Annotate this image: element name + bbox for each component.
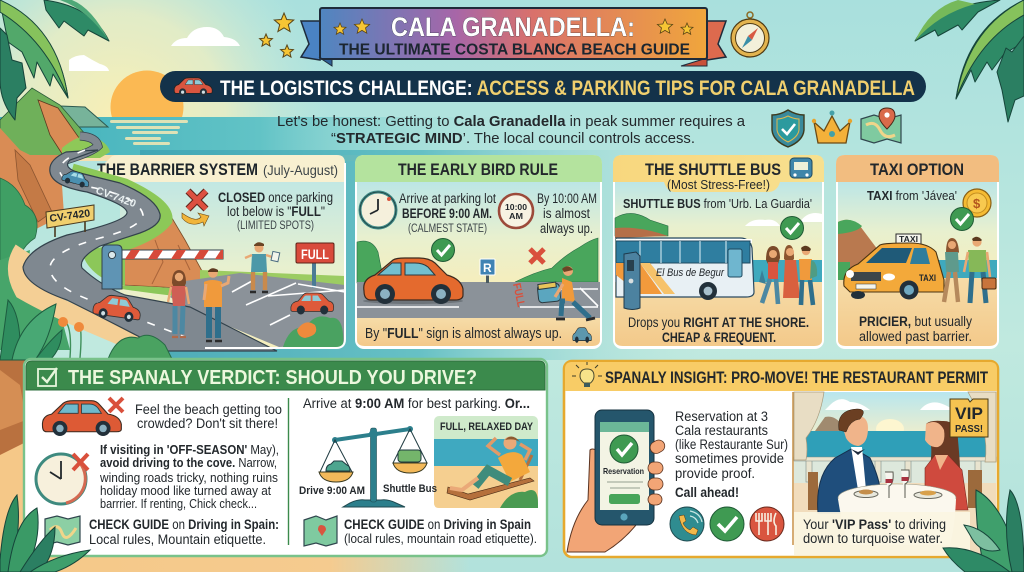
scale labels: Drive 9:00 AM — [299, 485, 365, 497]
hand holding phone: Reservation — [603, 466, 644, 476]
reservation text — [675, 409, 788, 500]
person relaxing in deck chair — [447, 436, 534, 500]
barrier callout: (LIMITED SPOTS) — [237, 220, 314, 232]
header strip — [86, 155, 345, 182]
early arrival text: Arrive at parking lot — [399, 191, 496, 206]
icon: bus — [790, 158, 812, 178]
shuttle benefits text: CHEAP & FREQUENT. — [662, 329, 776, 345]
banner stars — [334, 19, 693, 34]
guide text: CHECK GUIDE on Driving in Spain: — [89, 517, 279, 532]
ticket machine — [624, 252, 640, 310]
early arrival text: BEFORE 9:00 AM. — [402, 206, 492, 221]
header — [613, 155, 824, 192]
VIP pass ticket — [950, 399, 988, 437]
parking bay lines — [232, 281, 345, 325]
person: man pointing — [204, 268, 229, 341]
illustration: coastal cliffs and left palm — [0, 88, 110, 270]
beach picture — [434, 416, 538, 508]
guide text: (local rules, mountain road etiquette). — [344, 531, 537, 546]
subheading: (Most Stress-Free!) — [667, 178, 770, 192]
red car with X — [42, 398, 123, 436]
guide text: CHECK GUIDE on Driving in Spain — [344, 517, 531, 532]
panel sky — [120, 170, 345, 348]
route text: SHUTTLE BUS from 'Urb. La Guardia' — [623, 196, 812, 211]
dining man — [808, 409, 895, 513]
main title: CALA GRANADELLA: — [391, 12, 635, 42]
ten o'clock text: is almost — [543, 206, 590, 221]
road sign — [46, 205, 94, 237]
icon: clock 10am: AM — [509, 212, 523, 221]
foliage: top-left palm — [0, 0, 109, 120]
panel edge — [205, 163, 345, 348]
barrier callout: CLOSED once parking — [218, 190, 333, 205]
icon: coin: $ — [973, 196, 981, 211]
crowded text: Feel the beach getting too — [135, 402, 282, 417]
icon: crown — [812, 110, 852, 143]
heading: TAXI OPTION — [870, 161, 964, 179]
caption strip — [794, 512, 970, 555]
hand holding phone — [567, 410, 667, 552]
person: man with suitcase — [964, 237, 996, 303]
ten o'clock text: By 10:00 AM — [537, 191, 597, 206]
taxi benefits text — [859, 314, 972, 344]
beach picture: FULL, RELAXED DAY — [440, 421, 534, 433]
icon: map with pin — [861, 108, 901, 143]
icon: check — [432, 238, 454, 262]
icon: coin — [963, 189, 991, 217]
icon: check — [780, 216, 804, 240]
stars beside title — [260, 13, 294, 57]
full sign: FULL — [301, 247, 329, 262]
early arrival text: (CALMEST STATE) — [408, 223, 487, 235]
road label: CV-7420 — [94, 185, 138, 210]
off-season text — [99, 443, 279, 511]
taxi — [844, 234, 944, 300]
shuttle benefits text — [628, 314, 809, 345]
barrier callout — [218, 190, 333, 232]
shuttle benefits text: Drops you RIGHT AT THE SHORE. — [628, 314, 809, 330]
dining woman — [925, 421, 982, 510]
panel scene — [838, 182, 997, 346]
orange car — [363, 258, 463, 304]
barrier gate — [102, 245, 223, 289]
header — [565, 362, 997, 391]
icon: cutlery — [750, 507, 784, 541]
footer text: By "FULL" sign is almost always up. — [365, 326, 562, 342]
shuttle bus with label — [616, 238, 754, 300]
ground: green, sand and cliff — [0, 250, 70, 350]
guide text — [344, 517, 537, 546]
reservation text: Cala restaurants — [675, 423, 768, 438]
off-season text: If visiting in 'OFF-SEASON' May), — [100, 443, 279, 457]
subtitle: THE ULTIMATE COSTA BLANCA BEACH GUIDE — [339, 42, 690, 58]
reservation text: Reservation at 3 — [675, 409, 768, 424]
barrier callout: lot below is "FULL" — [227, 204, 325, 219]
panel: the spanaly verdict — [24, 359, 547, 556]
vertical divider — [792, 392, 794, 545]
column divider — [288, 398, 290, 545]
caption: Your 'VIP Pass' to driving — [803, 517, 946, 532]
small car icon — [573, 328, 592, 343]
panel: the barrier system — [0, 150, 345, 352]
icon: parking sign — [480, 259, 495, 283]
reservation text: (like Restaurante Sur) — [675, 437, 788, 452]
blue car on road — [61, 169, 91, 189]
panel scene — [615, 182, 822, 346]
panel: the shuttle bus — [613, 155, 824, 349]
icon: compass — [731, 12, 769, 57]
icon: clock 10am — [499, 194, 533, 228]
taxi: TAXI — [899, 235, 918, 244]
title banner — [301, 8, 726, 66]
caption — [803, 517, 946, 546]
person: kneeling driver — [555, 266, 595, 320]
VIP pass ticket: VIP — [955, 404, 983, 423]
off-season text: winding roads tricky, nothing ruins — [99, 471, 278, 485]
parking lot — [170, 273, 345, 347]
red car in lot — [291, 293, 334, 314]
icon: phone call — [670, 507, 704, 541]
panel: the early bird rule — [355, 155, 602, 349]
crowded text: crowded? Don't sit there! — [137, 416, 278, 431]
small crammed car — [537, 282, 561, 303]
guide text — [89, 517, 279, 547]
icon: map with pin — [304, 516, 337, 546]
foliage: top-right palm — [915, 0, 1024, 122]
crowded text — [135, 402, 282, 431]
clock with X — [36, 454, 88, 504]
intro text: “STRATEGIC MIND’. The local council controls access. — [331, 130, 695, 147]
winding road CV-7420 — [23, 150, 277, 351]
icon: red X — [530, 249, 544, 263]
icon: red X with arrow — [182, 191, 209, 226]
red car on road — [92, 293, 142, 323]
full sign — [296, 243, 334, 288]
panel scene — [357, 182, 600, 346]
ten o'clock text: always up. — [540, 221, 593, 236]
icon: map — [45, 516, 80, 545]
heading: THE SHUTTLE BUS — [645, 161, 781, 179]
bush and flower — [283, 316, 343, 347]
icon: shield — [772, 110, 804, 147]
heading: THE BARRIER SYSTEM — [97, 161, 258, 179]
icon: red car — [174, 78, 212, 96]
intro text: Let's be honest: Getting to Cala Granadella in peak summer requires a — [277, 113, 746, 130]
header — [355, 155, 602, 182]
ten o'clock text — [537, 191, 597, 236]
off-season text: holiday mood like turned away at — [100, 484, 271, 498]
icon: check — [710, 507, 744, 541]
guide text: Local rules, Mountain etiquette. — [89, 532, 266, 547]
reservation text: Call ahead! — [675, 485, 739, 500]
left column — [36, 398, 282, 547]
taxi origin text: TAXI from 'Jávea' — [867, 188, 957, 203]
taxi benefits text: allowed past barrier. — [859, 329, 972, 344]
taxi benefits text: PRICIER, but usually — [859, 314, 972, 329]
decorative clouds — [69, 27, 240, 71]
VIP pass ticket: PASS! — [955, 424, 983, 435]
icon: parking sign: R — [483, 261, 492, 275]
heading: THE SPANALY VERDICT: SHOULD YOU DRIVE? — [68, 366, 477, 389]
scale labels — [299, 483, 437, 497]
early arrival text — [399, 191, 496, 235]
balance scale — [319, 426, 427, 507]
person: woman — [168, 270, 189, 337]
off-season text: avoid driving to the cove. Narrow, — [100, 456, 277, 470]
scale labels: Shuttle Bus — [383, 483, 437, 495]
header — [836, 155, 999, 182]
icon: checkbox — [38, 368, 57, 386]
person: attendant with clipboard — [245, 242, 280, 292]
painted FULL on road: FULL — [510, 282, 527, 308]
icon: check — [950, 208, 974, 230]
right column — [299, 396, 538, 546]
reservation text: provide proof. — [675, 466, 755, 481]
heading: THE LOGISTICS CHALLENGE: ACCESS & PARKING TIPS FOR CALA GRANADELLA — [220, 77, 915, 100]
group of three travellers — [759, 245, 817, 305]
panel: taxi option — [836, 155, 999, 349]
caption: down to turquoise water. — [803, 531, 943, 546]
reservation text: sometimes provide — [675, 451, 784, 466]
panel: spanaly insight — [564, 361, 998, 557]
foliage: bottom-left leaves — [0, 495, 90, 572]
icon: clock 10am: 10:00 — [505, 203, 528, 212]
heading: THE EARLY BIRD RULE — [398, 161, 558, 179]
heading dates: (July-August) — [263, 162, 338, 178]
restaurant scene — [794, 392, 996, 555]
off-season text: barrrier. If renting, Chick check... — [100, 497, 257, 511]
header — [26, 361, 545, 390]
person: woman traveller — [944, 238, 959, 302]
intro text — [277, 113, 746, 147]
foliage: bottom-right leaves — [943, 490, 1024, 572]
arrive text: Arrive at 9:00 AM for best parking. Or... — [303, 396, 530, 411]
section bar: logistics challenge — [160, 71, 926, 102]
dining table — [838, 470, 956, 545]
taxi: TAXI — [919, 273, 936, 283]
foliage: lower-left plants — [0, 300, 172, 360]
icon: clock 9am — [360, 192, 396, 228]
shuttle bus with label: El Bus de Begur — [656, 267, 725, 279]
road sign: CV-7420 — [49, 207, 91, 225]
icon: light bulb — [572, 362, 602, 387]
